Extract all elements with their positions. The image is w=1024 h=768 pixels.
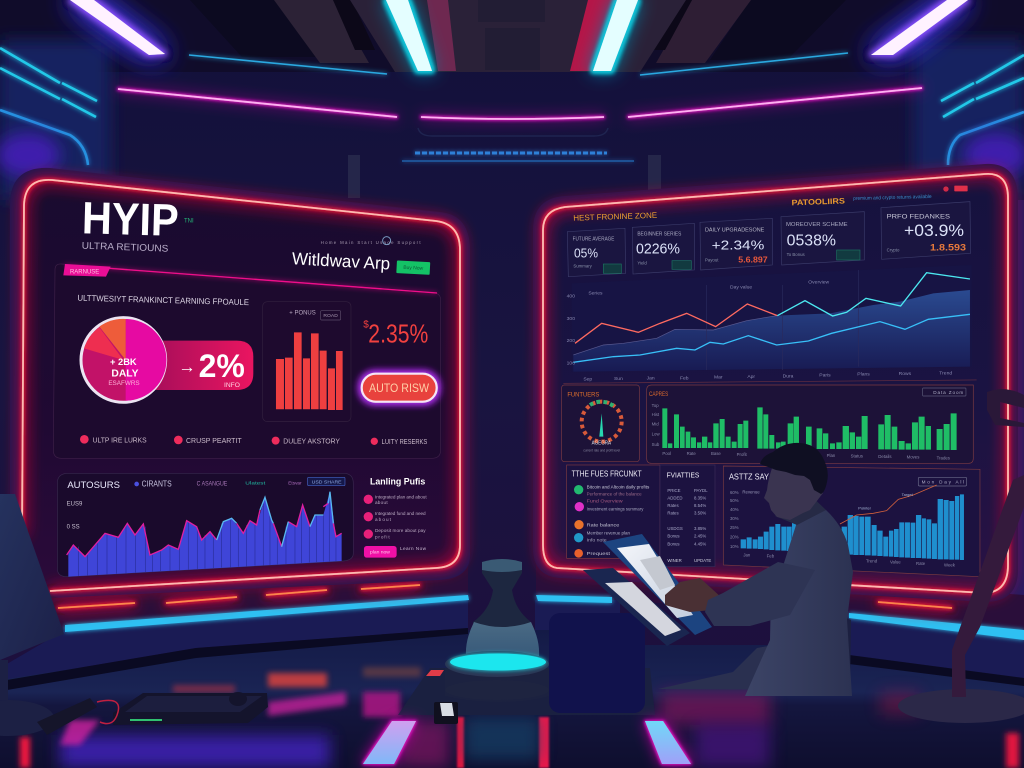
bar chart box: + PONUS — [289, 311, 316, 317]
ceiling — [0, 0, 1024, 200]
panel: fund list: Bitcoin and Altcoin daily profits — [587, 484, 650, 489]
list items — [364, 495, 427, 539]
panel: payouts table: ADDED — [667, 496, 682, 501]
legs — [658, 640, 840, 690]
chart legend: USD SHARE — [312, 479, 342, 485]
panel: payouts table: 8.54% — [694, 503, 706, 508]
panel: blue bar chart — [723, 466, 980, 577]
panel: blue bar chart: 10% — [730, 544, 739, 549]
list: landing perks — [364, 476, 427, 558]
stat card 5 — [881, 202, 971, 259]
panel: green bar chart: Trades — [937, 455, 950, 460]
pie chart: DALY — [111, 369, 139, 380]
clock icon — [383, 237, 391, 245]
pill: daily rate: INFO — [224, 382, 240, 389]
right panel frame — [533, 164, 1018, 602]
stat card 4: MOREOVER SCHEME — [786, 222, 848, 228]
panel: green bar chart: Profit — [737, 452, 748, 457]
title block — [81, 192, 194, 255]
line chart: Dura — [783, 373, 794, 379]
magenta wall neon lines — [118, 88, 922, 119]
stat card 3 — [700, 218, 772, 270]
panel: green bar chart: Data Zoom — [933, 390, 963, 395]
line chart: 300 — [567, 316, 575, 322]
monitor left — [0, 494, 64, 736]
panel: blue bar chart: Revenue — [742, 489, 760, 494]
line chart: Overview — [808, 279, 829, 285]
chart legend: CIRANTS — [142, 480, 172, 489]
panel: green bar chart: Top — [652, 403, 659, 408]
stat card 2: BEGINNER SERIES — [637, 232, 682, 238]
cyan outline — [217, 492, 333, 547]
list button: Learn Now — [400, 546, 427, 551]
panel: green bar chart: Moves — [907, 454, 919, 459]
stat card 3: 5.6.897 — [738, 256, 768, 265]
panel: green bar chart: Rate — [687, 451, 696, 456]
panel: payouts table: 8.35% — [694, 496, 706, 501]
line chart: Feb — [680, 375, 689, 381]
panel: blue bar chart: Target — [902, 492, 914, 497]
zone heading: HEST FRONINE ZONE — [573, 211, 657, 223]
stat card 3: Payout — [705, 258, 719, 263]
panel outline — [53, 264, 441, 458]
bench left with cyan strip — [0, 595, 469, 680]
line chart: Day value — [730, 284, 752, 290]
list heading: Lanling Pufis — [370, 476, 425, 486]
status icons — [943, 186, 968, 192]
neck — [775, 490, 826, 525]
header status text: premium and crypto returns available — [853, 194, 932, 202]
pie chart: + 2BK — [110, 357, 137, 367]
percent value: 2.35% — [368, 319, 428, 349]
legend: CRUSP PEARTIT — [186, 436, 242, 445]
centre wall vent with blue light — [402, 128, 634, 161]
neon frame — [22, 180, 460, 591]
panel: gauge: AGEGRA — [592, 441, 611, 447]
phone on desk — [434, 702, 458, 724]
axis labels — [67, 501, 83, 531]
stat card 1: 05% — [574, 246, 598, 261]
panel: fund list — [567, 465, 660, 558]
list items: Integrated plan and about — [375, 495, 427, 500]
central lamp bottle — [466, 559, 539, 656]
panel: payouts table: Rates — [667, 510, 679, 515]
green button: Buy Now — [403, 265, 424, 272]
list button: plan now — [370, 549, 390, 555]
panel: left dashboard — [22, 180, 460, 591]
line chart: Trend — [939, 370, 952, 376]
panel: fund list: Investment earnings summary — [587, 507, 644, 512]
top section — [563, 186, 977, 383]
stat card 3: +2.34% — [712, 237, 764, 252]
line chart: 200 — [567, 338, 575, 344]
list items: Integrated fund and need — [375, 511, 426, 516]
desk platform — [398, 668, 655, 715]
pill: daily rate: → — [178, 357, 196, 377]
percent value: $ — [363, 319, 369, 330]
panel: green bar chart: CAPRES — [649, 391, 668, 398]
panel: green bar chart: Low — [652, 432, 660, 437]
button: auto risw — [362, 374, 437, 402]
bar chart box: ROAD — [323, 313, 338, 319]
stat card 4 — [781, 212, 864, 265]
list items: Deposit more about pay — [375, 528, 426, 533]
stat card 5: Crypto — [887, 247, 900, 252]
neon frame — [543, 174, 1008, 593]
header tag: RARNUSE — [70, 269, 99, 275]
person — [583, 443, 853, 696]
panel: gauge — [562, 385, 639, 462]
panel: blue bar chart: 30% — [730, 516, 739, 521]
panel: fund list: Fund Overview — [587, 499, 623, 504]
withdraw app block — [291, 237, 430, 275]
panel: blue bar chart: ASTTZ SAY — [729, 471, 769, 481]
panel: blue bar chart: Feb — [767, 553, 775, 558]
legend bullet — [134, 482, 139, 486]
chart legend: C ASANGUE — [197, 480, 228, 487]
line chart — [567, 265, 972, 383]
panel: payouts table: 4.45% — [694, 541, 706, 546]
panel: fund list: Performance of the balance — [587, 492, 642, 497]
panel: right dashboard — [543, 174, 1008, 593]
panel: payouts table: 2.45% — [694, 533, 706, 538]
chair — [835, 617, 851, 695]
panel: blue bar chart: Pointer — [858, 505, 872, 510]
panel: payouts table: 3.50% — [694, 510, 706, 515]
pill: daily rate — [153, 341, 253, 390]
ceiling light: right white bar — [871, 0, 968, 55]
panel: blue bar chart: 25% — [730, 525, 739, 530]
panel: blue bar chart: Week — [944, 563, 956, 568]
red marker — [426, 670, 444, 676]
line chart: Sep — [583, 377, 592, 383]
purple wall glow — [0, 133, 1024, 620]
lower wall below panels — [30, 560, 1024, 632]
axis labels: 0 SS — [67, 525, 80, 531]
panel background — [543, 174, 1008, 593]
magenta outline — [67, 503, 342, 557]
panel: payouts table: Rates — [667, 503, 679, 508]
area chart panel — [57, 473, 353, 577]
orange wall dashes — [58, 585, 952, 608]
panel: blue bar chart: Jan — [743, 553, 751, 558]
line chart: Rows — [899, 371, 912, 377]
chart box — [57, 473, 353, 577]
floor — [0, 628, 1024, 768]
panel: payouts table — [660, 465, 715, 567]
stat card 2 — [632, 223, 694, 274]
stat card 4: 0538% — [787, 232, 836, 249]
panel background — [22, 180, 460, 591]
right wall cyan lights — [941, 55, 1024, 165]
hair — [760, 443, 828, 494]
panel: payouts table: Bonus — [667, 541, 680, 546]
floor light strip left — [363, 721, 416, 764]
line chart: Mar — [714, 374, 723, 380]
panel: fund list: Member revenue plan — [587, 530, 630, 535]
panel: blue bar chart: Rate — [916, 561, 926, 566]
button: auto risw: AUTO RISW — [369, 381, 430, 395]
remote control — [37, 698, 119, 735]
legend — [80, 435, 427, 446]
ceiling light: left cyan bar — [386, 0, 432, 71]
big tablet — [603, 534, 712, 635]
pie chart — [81, 318, 166, 402]
legend: ULTP IRE LURKS — [93, 435, 147, 444]
chart legend: Ulatest — [245, 481, 266, 487]
list items: about — [375, 500, 388, 505]
line chart: Jan — [647, 376, 655, 382]
panel: blue bar chart: Value — [890, 559, 901, 564]
panel: fund list: Rate balance — [587, 522, 620, 527]
stat card 1: FUTURE AVERAGE — [573, 237, 615, 243]
line chart: Sun — [614, 376, 623, 382]
panel: payouts table: PRICE — [667, 488, 681, 493]
panel: payouts table: PAYDL — [694, 488, 708, 493]
pill: daily rate: 2% — [199, 348, 245, 384]
panel: green bar chart: Details — [878, 454, 892, 459]
line chart: Paris — [819, 373, 831, 379]
stat card 5: 1.8.593 — [930, 243, 966, 253]
heading: HYIP — [81, 192, 179, 246]
stat card 5: PRFO FEDANKES — [887, 215, 950, 221]
bar chart box — [263, 302, 351, 422]
panel: green bar chart: Plan — [827, 453, 836, 458]
blue area — [68, 492, 342, 577]
panel: blue bar chart: Mon Day All — [922, 479, 964, 484]
thin cyan ceiling trims — [189, 53, 848, 75]
section heading: ULTTWESIYT FRANKINCT EARNING FPOAULE — [77, 293, 250, 307]
arm and hand — [665, 562, 815, 626]
panel: payouts table: WINER — [667, 558, 682, 563]
panel: blue bar chart: Trend — [866, 559, 878, 564]
stat card 1 — [567, 228, 626, 277]
pie chart: ESAFWRS — [108, 380, 140, 387]
stat card 5: +03.9% — [904, 221, 964, 240]
left panel frame — [10, 168, 470, 598]
subtitle: ULTRA RETIOUNS — [82, 241, 169, 255]
face — [764, 468, 823, 520]
panel: gauge: FUNTUERS — [567, 392, 600, 399]
legend: LUITY RESERKS — [382, 437, 427, 446]
panel: earnings summary — [53, 264, 441, 458]
panel: payouts table: FVIATTIES — [667, 470, 699, 479]
panel: green bar chart: Pool — [662, 451, 671, 456]
line chart: Apr — [747, 374, 755, 380]
line chart: Plans — [857, 372, 870, 378]
glowing lamp — [445, 651, 549, 702]
list button — [364, 546, 427, 558]
panel: payouts table: UPDATE — [694, 558, 711, 563]
ceiling light: left white bar — [70, 0, 165, 55]
small nav text: Home Main Start Usage Support — [321, 240, 421, 245]
panel: gauge: current rate and profit level — [583, 448, 620, 452]
right stand — [898, 389, 1024, 723]
panel: blue bar chart: 50% — [730, 498, 739, 503]
panel: payouts table: 3.85% — [694, 526, 706, 531]
line chart: 100 — [567, 360, 575, 366]
badge text: TNI — [184, 218, 194, 224]
line chart: 400 — [567, 293, 575, 299]
panel: blue bar chart: 60% — [730, 490, 739, 495]
ceiling light: right cyan bar — [593, 0, 638, 71]
panel: fund list: Info note — [587, 538, 607, 543]
list items: about — [375, 517, 392, 522]
stat card 2: 0226% — [636, 242, 680, 258]
floor light strip right — [645, 721, 691, 764]
left wall cyan lights — [0, 48, 97, 165]
panel: green bar chart: Sub — [652, 442, 660, 447]
stat card 1: Summary — [573, 264, 593, 269]
line chart: Series — [588, 290, 603, 296]
stat card 3: DAILY UPGRADESONE — [705, 227, 765, 233]
panel: blue bar chart: 20% — [730, 534, 739, 539]
small tablet — [583, 568, 690, 646]
chart legend: Etsvar — [288, 480, 302, 486]
panel: green bar chart: Hist — [652, 412, 660, 417]
legend: DULEY AKSTORY — [283, 436, 340, 445]
panel: green bar chart: Status — [851, 454, 863, 459]
bench right with cyan strip — [535, 595, 1024, 678]
stat card 4: To Bonus — [787, 252, 805, 257]
lower section — [562, 385, 980, 577]
panel: green bar chart — [647, 385, 973, 463]
panel: blue bar chart: 40% — [730, 507, 739, 512]
panel: fund list: TTHE FUES FRCUNKT — [572, 469, 642, 479]
wall brackets — [348, 155, 661, 198]
stat card 2: Yield — [637, 260, 647, 265]
panel: payouts table: USDGS — [667, 526, 683, 531]
panel: green bar chart: Mid — [652, 422, 659, 427]
axis labels: EUS9 — [67, 501, 83, 507]
panel: green bar chart: Base — [711, 451, 721, 456]
panel: fund list: Prequest — [587, 551, 611, 557]
header tag — [63, 264, 111, 277]
panel: payouts table: Bonus — [667, 533, 680, 538]
portfolio heading: PATOOLIIRS — [791, 196, 846, 207]
magenta header line — [65, 265, 437, 293]
list items: profit — [375, 534, 390, 539]
withdraw heading: Witldwav Arp — [291, 248, 391, 273]
keyboard device — [113, 692, 268, 725]
chart legend — [142, 477, 345, 489]
torso — [745, 510, 853, 696]
bar separators — [78, 493, 336, 576]
speaker — [549, 613, 645, 713]
chart heading: AUTOSURS — [67, 480, 120, 490]
